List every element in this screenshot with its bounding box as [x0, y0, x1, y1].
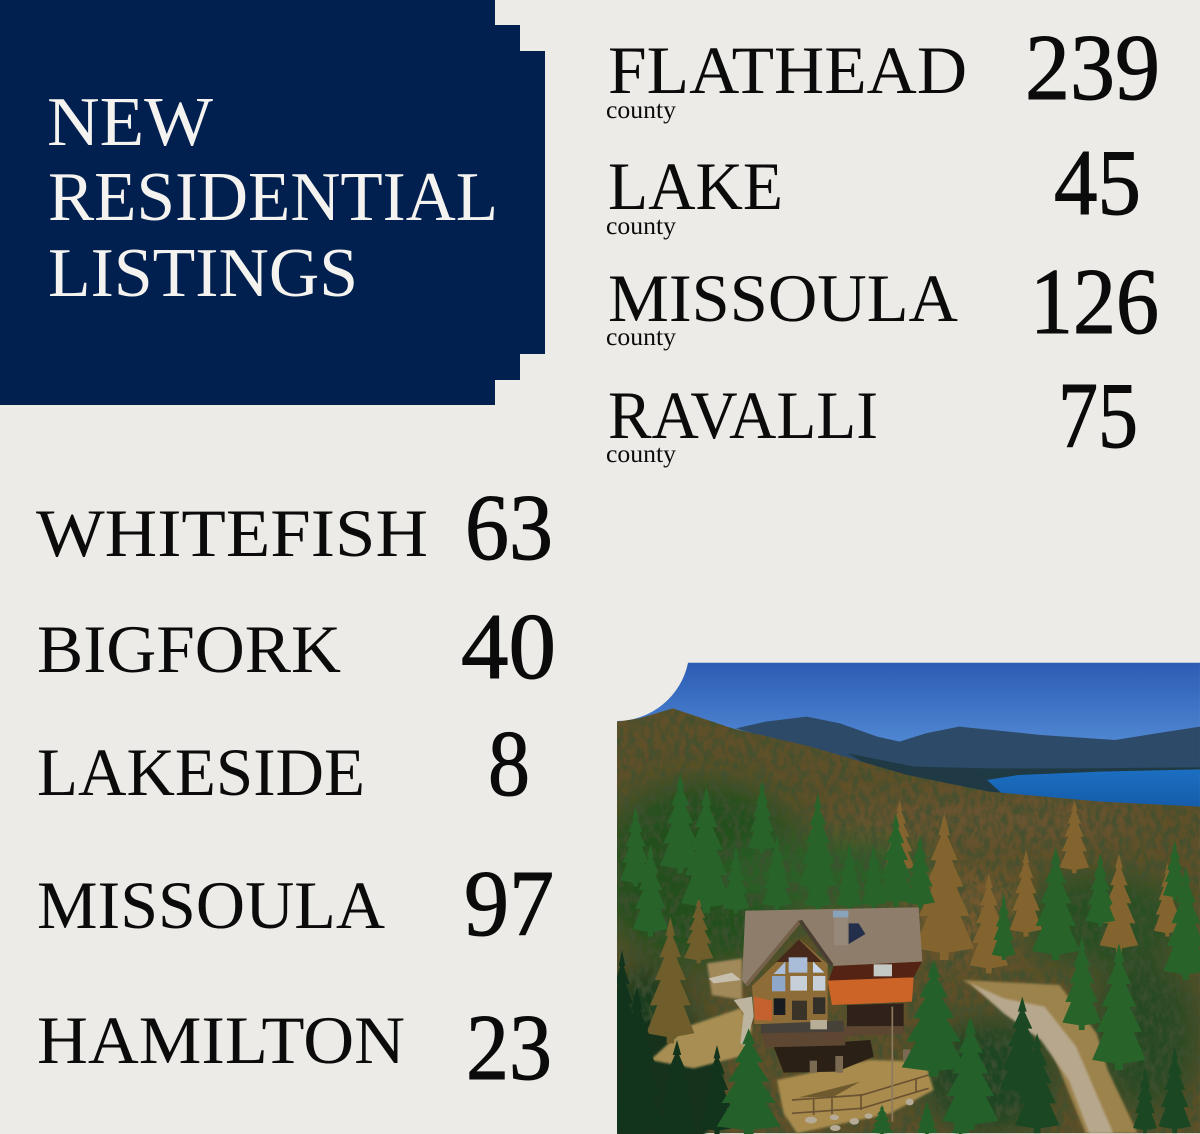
county row: Flathead: FLATHEAD	[608, 32, 967, 108]
county row: Flathead	[606, 16, 1160, 124]
house and foreground (coordinates at 3x)	[597, 897, 998, 1134]
county row: Ravalli	[606, 364, 1138, 468]
left trees	[646, 897, 713, 1043]
city row: Missoula: MISSOULA	[37, 867, 385, 943]
roof	[742, 907, 922, 986]
county row: Flathead: 239	[1025, 16, 1160, 120]
windows	[789, 957, 807, 973]
city row: Missoula	[37, 852, 554, 956]
city row: Bigfork	[37, 595, 556, 699]
county row: Ravalli: RAVALLI	[608, 377, 878, 453]
forest floor shade	[617, 1020, 725, 1134]
title panel: RESIDENTIAL	[48, 159, 498, 236]
city row: Bigfork: 40	[461, 595, 556, 699]
right clearing and road	[963, 980, 1138, 1133]
title panel: LISTINGS	[48, 235, 358, 312]
city row: Missoula: 97	[464, 852, 554, 956]
county row: Missoula	[606, 250, 1159, 354]
photo corner cut-out	[617, 660, 690, 721]
city row: Whitefish: WHITEFISH	[36, 495, 428, 571]
foreground conifers	[717, 960, 998, 1134]
county row: Lake: 45	[1054, 131, 1141, 235]
county row: Lake	[606, 131, 1141, 240]
city row: Hamilton	[37, 996, 552, 1100]
chimney	[834, 917, 848, 945]
copper roof	[828, 977, 914, 1005]
pale back trees	[885, 800, 1181, 973]
county row: Ravalli: 75	[1058, 364, 1138, 468]
county row: Ravalli: county	[606, 441, 677, 468]
county row: Missoula: 126	[1030, 250, 1159, 354]
city row: Whitefish: 63	[465, 476, 553, 580]
city row: Bigfork: BIGFORK	[37, 611, 341, 687]
green conifers	[620, 773, 1200, 1070]
county row: Flathead: county	[606, 97, 677, 124]
city row: Whitefish	[36, 476, 553, 580]
title panel	[0, 0, 545, 405]
city row: Hamilton: 23	[466, 996, 552, 1100]
photo: log home in a forest above a lake	[595, 663, 1200, 1134]
city row: Lakeside: 8	[488, 712, 530, 816]
left clearing	[650, 1008, 752, 1068]
city row: Hamilton: HAMILTON	[37, 1002, 405, 1078]
rocks	[805, 1099, 914, 1131]
county row: Lake: county	[606, 213, 677, 240]
city row: Lakeside	[37, 712, 530, 816]
county row: Missoula: MISSOULA	[608, 260, 958, 336]
county row: Missoula: county	[606, 324, 677, 351]
title panel: NEW	[47, 84, 213, 161]
bottom clearing	[777, 1060, 934, 1133]
gable wall	[752, 939, 828, 1024]
upper wall	[829, 962, 922, 981]
city row: Lakeside: LAKESIDE	[37, 734, 365, 810]
county row: Lake: LAKE	[608, 148, 783, 224]
lower house and deck	[847, 1003, 904, 1031]
fence	[792, 1075, 929, 1115]
